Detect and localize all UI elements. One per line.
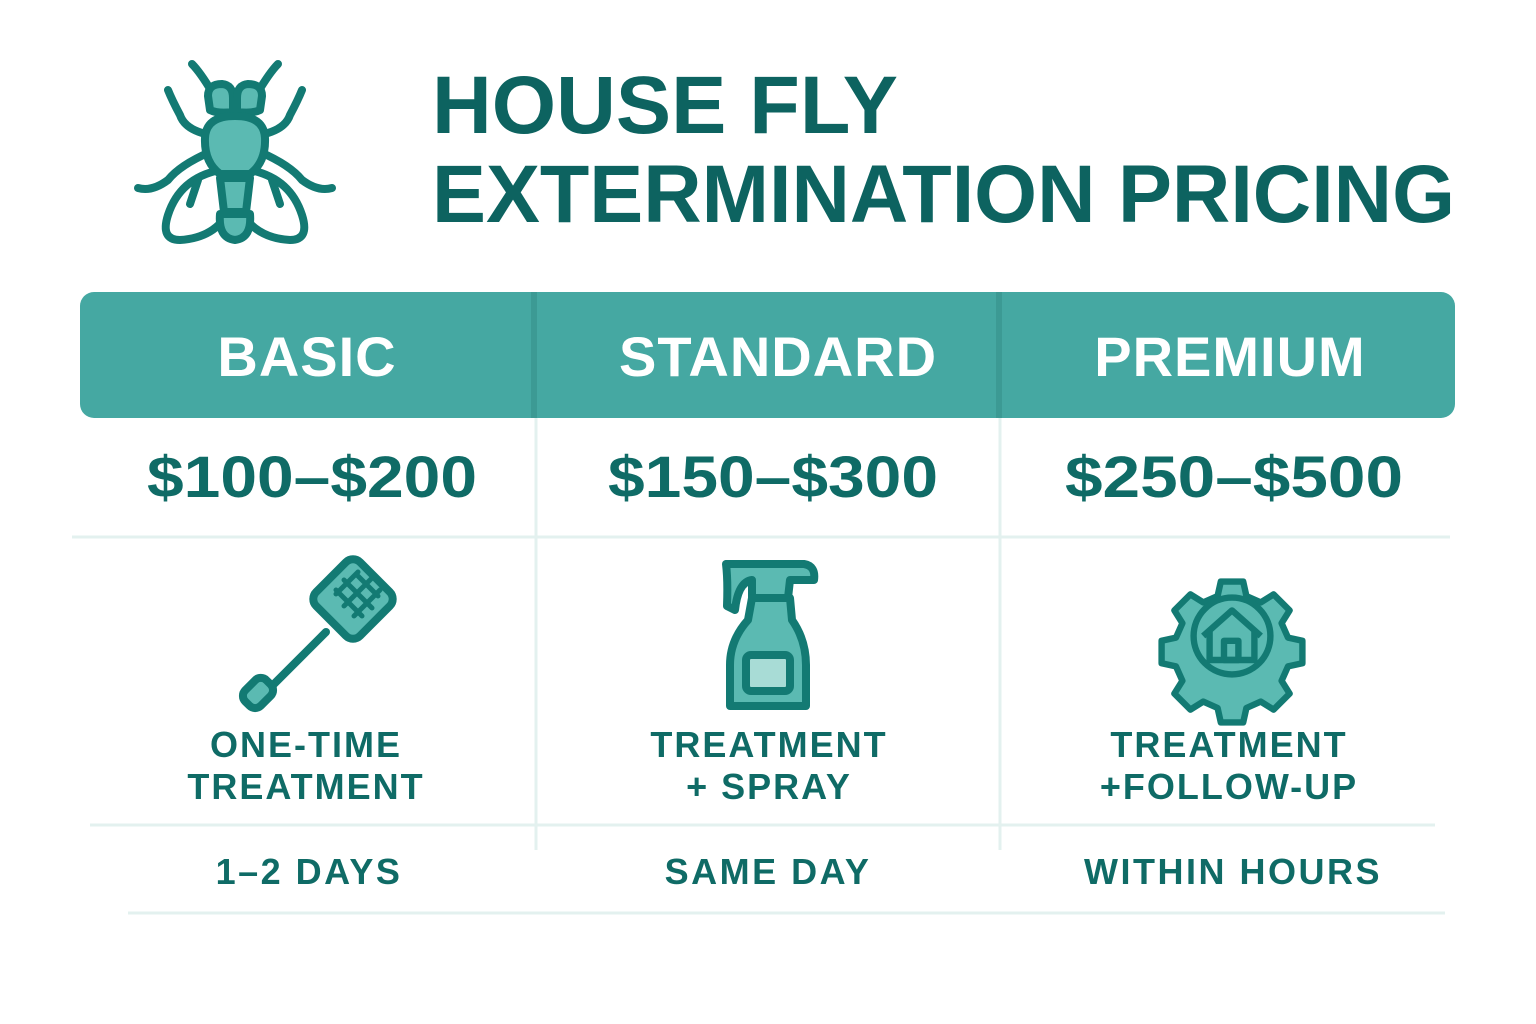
header band: PREMIUM: [1094, 325, 1366, 388]
title: EXTERMINATION PRICING: [432, 149, 1455, 240]
response times: SAME DAY: [665, 851, 871, 892]
icon: gear with house: [1162, 582, 1302, 722]
icon: house fly: [138, 64, 332, 240]
service labels: +FOLLOW-UP: [1100, 766, 1358, 807]
response times: [216, 851, 1382, 892]
service labels: TREATMENT: [187, 766, 425, 807]
prices: $250–$500: [1065, 445, 1403, 510]
service labels: TREATMENT: [650, 724, 888, 765]
prices: [147, 445, 1403, 510]
icon: fly swatter: [240, 555, 397, 711]
response times: 1–2 DAYS: [216, 851, 402, 892]
title: [432, 60, 1455, 240]
header band: [80, 292, 1455, 418]
service labels: + SPRAY: [686, 766, 852, 807]
header band: BASIC: [217, 325, 397, 388]
prices: $150–$300: [608, 445, 938, 510]
header band: STANDARD: [619, 325, 937, 388]
service labels: ONE-TIME: [210, 724, 402, 765]
service labels: [187, 724, 1358, 807]
response times: WITHIN HOURS: [1084, 851, 1382, 892]
prices: $100–$200: [147, 445, 477, 510]
icon: spray bottle: [726, 564, 814, 706]
grid lines: [72, 418, 1450, 913]
title: HOUSE FLY: [432, 60, 898, 151]
service labels: TREATMENT: [1110, 724, 1348, 765]
